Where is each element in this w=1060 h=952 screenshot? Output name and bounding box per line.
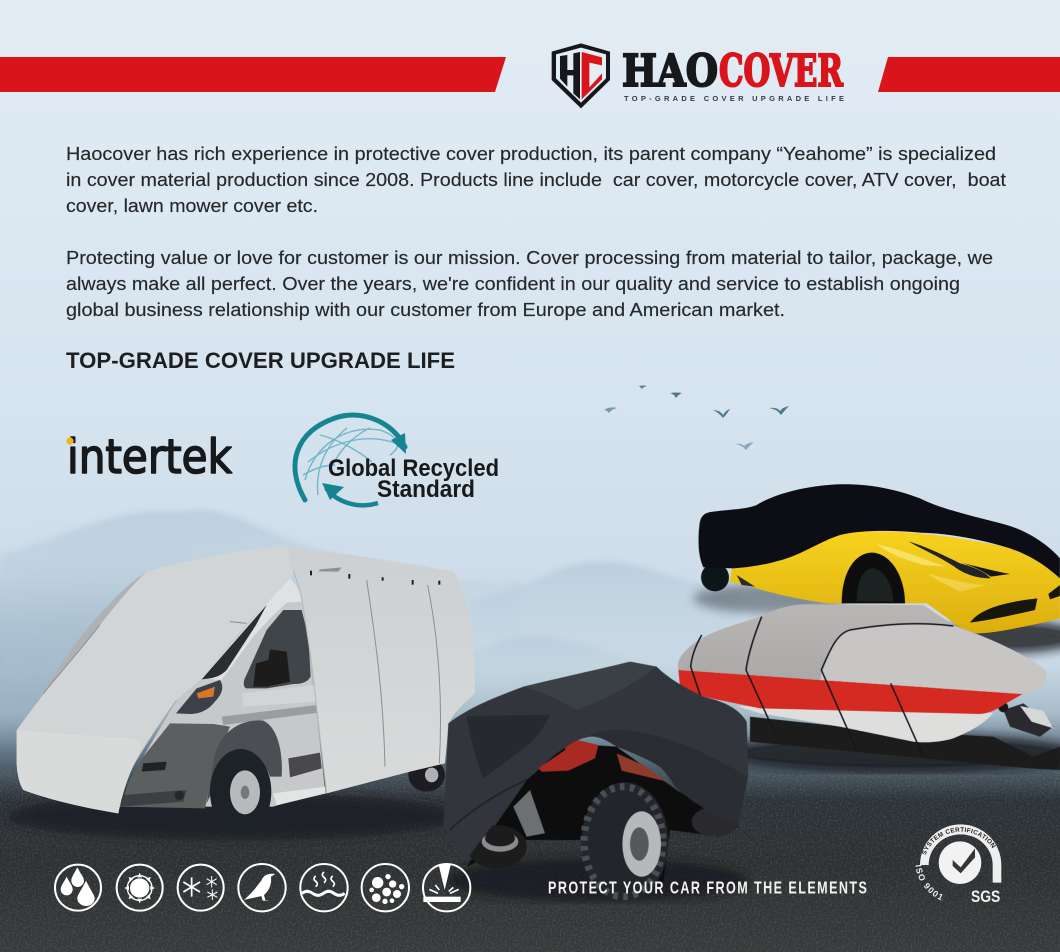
front tyre [582, 782, 668, 901]
logo: Global Recycled Standard [295, 415, 499, 505]
cover: front section [17, 547, 293, 813]
icon: dust particles [362, 864, 409, 911]
product: covered sports car [693, 484, 1060, 653]
paragraph: mission: Protecting value or love for customer is our mission. Cover processing from material to tailor, package, we [66, 247, 993, 268]
front wheel [842, 553, 905, 603]
A-pillar [202, 578, 302, 680]
icon: abrasion point [423, 864, 470, 911]
trailer [750, 717, 1060, 770]
icon: bird [238, 864, 286, 911]
tagline: TOP-GRADE COVER UPGRADE LIFE [624, 94, 844, 103]
red body parts [538, 737, 598, 772]
straps [691, 617, 953, 757]
windshield [202, 605, 267, 679]
product: covered camper van [7, 547, 475, 840]
ATV cover [443, 662, 748, 862]
red bar right [878, 57, 1060, 92]
badge: SGS ISO 9001: SGS [971, 887, 1000, 906]
front bumper [120, 723, 230, 808]
headlight [176, 680, 222, 714]
logo: Global Recycled Standard: Global Recycled [328, 455, 499, 482]
cover: rear section [280, 547, 475, 793]
car body [730, 531, 1060, 633]
paragraph: company experience: cover, lawn mower cover etc. [66, 195, 318, 216]
paragraph: mission: global business relationship with our customer from Europe and American market. [66, 299, 785, 320]
paragraph: company experience: in cover material production since 2008. Products line include car cover, motorcycle cover, ATV cover, boat [66, 169, 1006, 190]
wordmark: HAO [622, 46, 718, 97]
grey cover [678, 604, 1047, 694]
van body [120, 580, 325, 807]
side window [244, 610, 311, 688]
distant mountains [0, 510, 740, 720]
paragraph: company experience [66, 143, 1006, 216]
left wheel [467, 825, 527, 868]
red bar left [0, 57, 506, 92]
icon: heat and water [300, 864, 348, 911]
icon: water drops [55, 865, 101, 911]
logo: Intertek: intertek [67, 430, 233, 485]
paragraph: mission [66, 247, 993, 320]
rear wheel [692, 807, 738, 837]
mirror [253, 649, 290, 687]
ATV chassis [467, 743, 738, 890]
red stripe [678, 670, 1023, 714]
icon: HC shield [552, 43, 610, 108]
rear wheel [408, 758, 445, 792]
paragraph: company experience: Haocover has rich experience in protective cover production, its parent company “Yeahome” is specialized [66, 143, 996, 164]
road texture [0, 770, 1060, 952]
badge: SGS ISO 9001: SYSTEM CERTIFICATION [922, 827, 996, 855]
product: covered ATV [443, 662, 750, 903]
cover: lower flap [17, 730, 142, 813]
globe lines [303, 428, 400, 495]
cover: side shading [43, 572, 147, 693]
badge: SGS ISO 9001: ISO 9001 [915, 864, 942, 900]
product: covered boat on trailer [678, 604, 1060, 773]
suspension [513, 790, 545, 837]
icon: snowflakes [178, 865, 224, 911]
logo: Global Recycled Standard: Standard [377, 476, 475, 503]
wheel arch [207, 720, 282, 803]
paragraph: mission: always make all perfect. Over the years, we're confident in our quality and service to establish ongoing [66, 273, 960, 294]
step [273, 787, 326, 805]
recycling arrows [295, 415, 405, 500]
heading: TOP-GRADE COVER UPGRADE LIFE [66, 348, 455, 373]
hull [737, 706, 993, 742]
tagline: protect your car: PROTECT YOUR CAR FROM THE ELEMENTS [548, 879, 867, 898]
birds [604, 386, 789, 450]
badge: SGS ISO 9001 [915, 824, 1002, 906]
fold and seam lines [43, 570, 441, 793]
black cover [698, 484, 1060, 578]
logo: Haocover: COVER [719, 46, 843, 97]
front wheel [210, 749, 271, 834]
logo: Haocover [552, 43, 844, 108]
icon: sun [117, 865, 163, 911]
feature icons row [55, 864, 470, 911]
